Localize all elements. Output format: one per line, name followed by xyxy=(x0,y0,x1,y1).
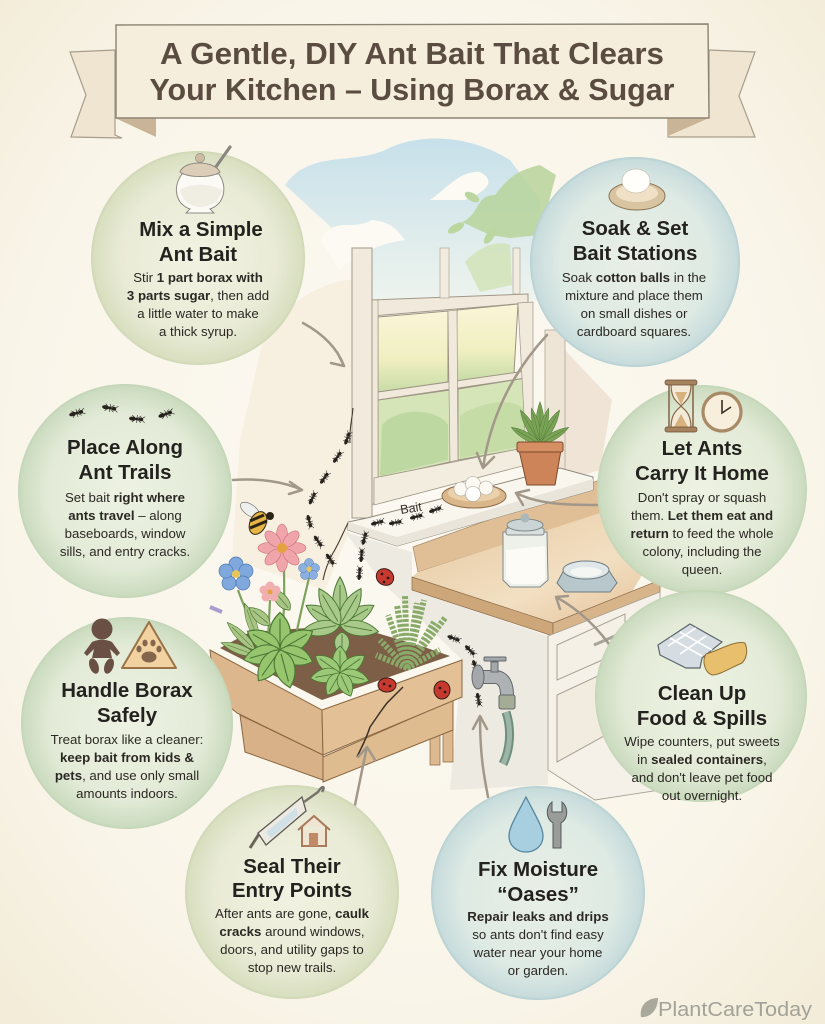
icon: baby xyxy=(84,618,120,675)
panel: let ants carry it home: colony, including the xyxy=(642,544,762,559)
icon: wrench xyxy=(547,802,567,848)
panel: soak and set bait stations: Bait Stations xyxy=(573,243,697,265)
jar of sugar xyxy=(503,514,548,587)
ant row on trail panel xyxy=(69,403,175,424)
panel: handle borax safely: keep bait from kids & xyxy=(60,750,194,765)
icon: cotton ball on dish xyxy=(609,169,665,210)
panel: clean up food and spills: Food & Spills xyxy=(637,708,767,730)
panel: mix a simple ant bait: Ant Bait xyxy=(159,244,237,266)
panel: handle borax safely: Handle Borax xyxy=(61,680,193,702)
panel: mix a simple ant bait: a little water to make xyxy=(137,306,259,321)
icon: caulk tube xyxy=(250,787,324,848)
watercolor sky xyxy=(285,139,540,310)
panel: clean up food and spills xyxy=(595,590,807,803)
panel: seal their entry points: doors, and utility gaps to xyxy=(220,942,364,957)
wall shading xyxy=(232,280,612,790)
panel: let ants carry it home: them. Let them eat and xyxy=(631,508,773,523)
thyme plant xyxy=(376,595,445,668)
title text: A Gentle, DIY Ant Bait That Clears xyxy=(160,36,664,71)
counter and cabinet xyxy=(412,480,660,800)
panel: soak and set bait stations: Soak & Set xyxy=(582,218,688,240)
panel: place along ant trails: Set bait right where xyxy=(65,490,185,505)
panel: fix moisture oases: Fix Moisture xyxy=(478,859,598,881)
icon: sponge xyxy=(704,642,747,675)
panel: clean up food and spills: Wipe counters, put sweets xyxy=(624,734,780,749)
window xyxy=(352,248,565,518)
cotton ball dish xyxy=(442,476,506,508)
panel: soak and set bait stations: mixture and place them xyxy=(565,288,703,303)
panel: mix a simple ant bait: Stir 1 part borax with xyxy=(133,270,263,285)
panel: fix moisture oases: or garden. xyxy=(508,963,568,978)
panel: handle borax safely: Treat borax like a cleaner: xyxy=(51,732,203,747)
panel: mix a simple ant bait xyxy=(91,147,305,365)
panel: let ants carry it home: queen. xyxy=(682,562,722,577)
panel: seal their entry points xyxy=(185,785,399,999)
panel: soak and set bait stations: cardboard squares. xyxy=(577,324,691,339)
bee xyxy=(238,499,274,537)
panel: soak and set bait stations: Soak cotton balls in the xyxy=(562,270,706,285)
panel: place along ant trails: Place Along xyxy=(67,437,183,459)
title text xyxy=(150,36,674,107)
panel: fix moisture oases: Repair leaks and drips xyxy=(467,909,609,924)
icon: house xyxy=(298,816,330,846)
icon: paw warning triangle xyxy=(122,622,176,668)
panel: seal their entry points: Seal Their xyxy=(243,856,341,878)
herb pot xyxy=(510,402,570,485)
arrows xyxy=(233,323,613,805)
panel: handle borax safely: amounts indoors. xyxy=(76,786,178,801)
panel: fix moisture oases: water near your home xyxy=(473,945,602,960)
panel: let ants carry it home: return to feed the whole xyxy=(631,526,773,541)
panel: let ants carry it home: Don't spray or squash xyxy=(638,490,766,505)
ant trail xyxy=(304,430,483,708)
panel: handle borax safely: pets, and use only small xyxy=(55,768,199,783)
icon: hourglass xyxy=(665,380,697,432)
panel: clean up food and spills: out overnight. xyxy=(662,788,742,803)
panel: seal their entry points: After ants are gone, caulk xyxy=(215,906,369,921)
faucet and hose xyxy=(472,657,515,764)
panel: place along ant trails: ants travel – along xyxy=(68,508,182,523)
flowers xyxy=(210,524,320,612)
pet food bowl xyxy=(557,561,617,592)
panel: clean up food and spills: and don't leave pet food xyxy=(631,770,773,785)
ladybugs xyxy=(373,565,450,699)
panel: seal their entry points: stop new trails. xyxy=(248,960,336,975)
panel: fix moisture oases: “Oases” xyxy=(497,884,579,906)
icon: clock xyxy=(703,393,741,431)
panel: soak and set bait stations: on small dishes or xyxy=(581,306,688,321)
tree foliage xyxy=(446,165,556,292)
panel: seal their entry points: cracks around windows, xyxy=(219,924,365,939)
panel: handle borax safely: Safely xyxy=(97,705,158,727)
panel: soak and set bait stations xyxy=(530,157,740,367)
panel: let ants carry it home xyxy=(597,380,807,595)
panel: place along ant trails: baseboards, window xyxy=(65,526,186,541)
panel: clean up food and spills: in sealed containers, xyxy=(637,752,767,767)
icon: folded cloth xyxy=(658,624,722,668)
panel: fix moisture oases xyxy=(431,786,645,1000)
panel: handle borax safely xyxy=(21,617,233,829)
panel: mix a simple ant bait: Mix a Simple xyxy=(139,219,263,241)
panel: let ants carry it home: Let Ants xyxy=(662,438,742,460)
panel: place along ant trails: sills, and entry cracks. xyxy=(60,544,190,559)
panel: clean up food and spills: Clean Up xyxy=(658,683,746,705)
panel: place along ant trails: Ant Trails xyxy=(79,462,171,484)
panel: place along ant trails xyxy=(18,384,232,598)
title text: Your Kitchen – Using Borax & Sugar xyxy=(150,72,674,107)
panel: mix a simple ant bait: a thick syrup. xyxy=(159,324,237,339)
wall cracks xyxy=(323,408,353,580)
garden planter xyxy=(210,625,462,782)
bait label: Bait xyxy=(399,500,423,517)
window sill xyxy=(348,468,593,546)
panel: fix moisture oases: so ants don't find easy xyxy=(472,927,604,942)
panel: let ants carry it home: Carry It Home xyxy=(635,463,769,485)
logo PlantCareToday: PlantCareToday xyxy=(658,999,812,1021)
icon: water drop xyxy=(509,797,543,852)
icon: sugar bowl xyxy=(176,147,230,213)
banner title xyxy=(70,24,755,138)
panel: mix a simple ant bait: 3 parts sugar, then add xyxy=(127,288,269,303)
garden plants and flowers xyxy=(210,524,445,699)
panel: seal their entry points: Entry Points xyxy=(232,880,352,902)
